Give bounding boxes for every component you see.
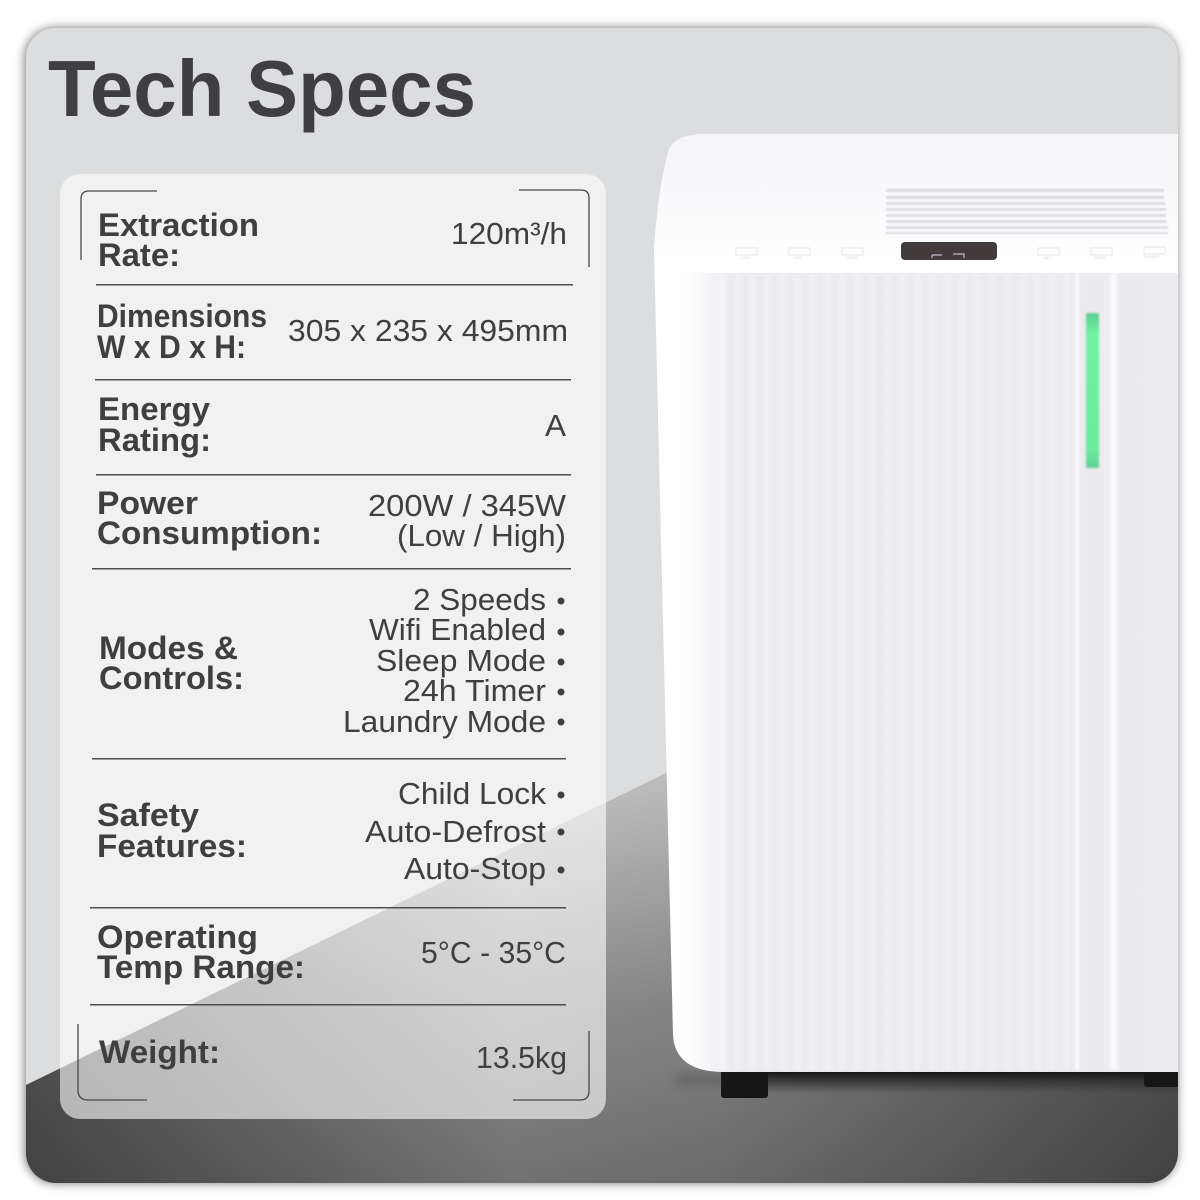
row: operating temp range: 5°C - 35°C — [421, 935, 566, 970]
corner brackets — [78, 190, 589, 1100]
product: dehumidifier — [654, 134, 1184, 1098]
row: power consumption: 200W / 345W — [368, 488, 567, 523]
row: safety features: Auto-Defrost — [365, 814, 546, 849]
dark diagonal floor — [26, 772, 1178, 1183]
row: modes and controls: Wifi Enabled — [369, 612, 546, 647]
row: dimensions — [97, 298, 568, 365]
row: weight — [99, 1034, 567, 1075]
spec panel — [60, 174, 606, 1119]
control buttons: MODE — [1094, 255, 1106, 260]
top vents — [886, 189, 1168, 234]
row: power consumption: Consumption: — [97, 515, 322, 551]
row: safety features: Auto-Stop — [404, 851, 546, 886]
feet — [721, 1072, 1178, 1098]
row: operating temp range: Temp Range: — [97, 949, 305, 985]
row: weight: 13.5kg — [476, 1040, 567, 1075]
row: extraction rate: Extraction — [98, 207, 259, 243]
control buttons: ADJ — [1044, 255, 1052, 260]
control buttons: TIMER — [845, 255, 858, 260]
row: modes and controls: Modes & — [99, 630, 238, 666]
row: modes and controls: 2 Speeds — [413, 582, 546, 617]
row: extraction rate: Rate: — [98, 237, 180, 273]
body ribs — [715, 275, 1070, 1070]
body front — [654, 250, 1178, 1072]
row: safety features: Features: — [97, 828, 247, 864]
row: energy rating: A — [545, 408, 566, 443]
row: modes and controls: Sleep Mode — [376, 643, 546, 678]
row: weight: Weight: — [99, 1034, 220, 1070]
control buttons: LOCK — [740, 255, 751, 260]
row: operating temp range: Operating — [97, 919, 258, 955]
row: energy rating — [98, 391, 566, 458]
centre channel — [1075, 272, 1117, 1070]
row: power consumption: (Low / High) — [397, 518, 566, 553]
top face — [654, 134, 1178, 273]
row: extraction rate — [98, 207, 567, 273]
row: modes and controls: Laundry Mode — [343, 704, 546, 739]
row: energy rating: Energy — [98, 391, 210, 427]
control buttons: FAN — [794, 255, 802, 260]
control buttons: POWER — [1144, 254, 1159, 259]
row: power consumption: Power — [97, 485, 198, 521]
title: Tech Specs — [48, 44, 476, 133]
row: modes and controls: 24h Timer — [403, 673, 546, 708]
row: operating temp range — [97, 919, 566, 985]
row: power consumption — [97, 485, 567, 553]
row: dimensions: W x D x H: — [97, 329, 246, 365]
row: safety features — [97, 776, 564, 886]
row: safety features: Safety — [97, 797, 199, 833]
display — [901, 242, 997, 260]
floor shadow under product — [676, 1072, 1178, 1092]
row: dimensions: Dimensions — [97, 298, 267, 334]
row: extraction rate: 120m³/h — [451, 216, 567, 251]
control buttons — [736, 247, 1165, 260]
row: dimensions: 305 x 235 x 495mm — [288, 313, 568, 348]
row: safety features: Child Lock — [398, 776, 546, 811]
green indicator light — [1086, 313, 1099, 468]
row: modes and controls — [99, 582, 564, 739]
row: modes and controls: Controls: — [99, 660, 244, 696]
row: energy rating: Rating: — [98, 422, 211, 458]
